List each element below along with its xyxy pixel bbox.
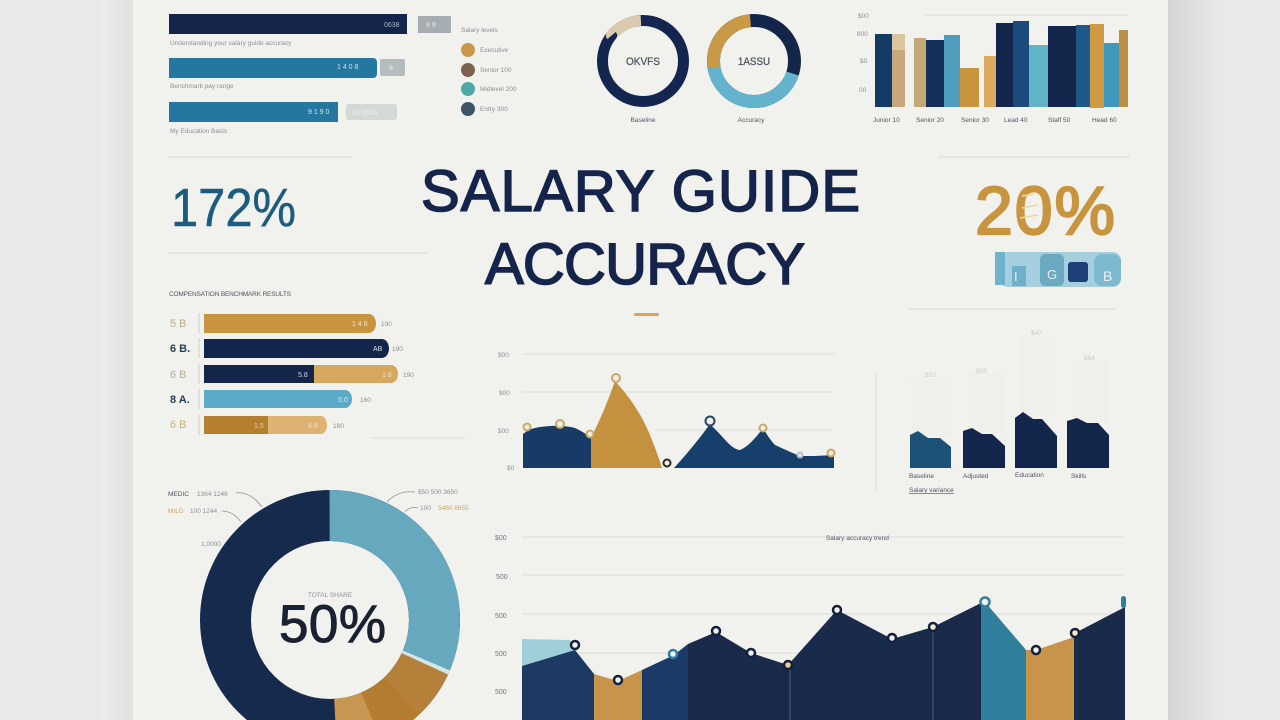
row 2: 190: [392, 346, 403, 353]
blue label block: G: [1047, 267, 1057, 282]
column labels: Skills: [1071, 473, 1087, 480]
axis labels: $00: [498, 428, 509, 435]
value labels: $47: [1031, 330, 1042, 337]
y axis labels: [857, 13, 869, 94]
axis labels: $00: [499, 390, 510, 397]
panel: horizontal bars by group: COMPENSATION BENCHMARK RESULTS: [169, 291, 292, 298]
donut callouts: MEDIC: [168, 491, 189, 498]
y axis labels: $00: [858, 13, 869, 20]
area: gold peak: [591, 381, 662, 468]
panel: top horizontal bars: [169, 14, 451, 135]
bar 3: 28 0000: [352, 110, 377, 117]
column labels: Adjusted: [963, 473, 989, 480]
legend item: gold: Executive: [480, 47, 509, 54]
donut callouts: 100 1244: [190, 508, 217, 515]
column labels: [909, 472, 1087, 494]
row 1: 1 4 8: [352, 321, 368, 328]
row 1: 5 B: [170, 318, 187, 330]
row 4: [170, 389, 371, 409]
bottom area chart: [495, 535, 1126, 720]
bar 1: 8 8: [426, 22, 436, 29]
x axis labels: Lead 40: [1004, 117, 1028, 124]
column labels: Salary variance: [909, 487, 954, 494]
legend item: slate: Entry 300: [480, 106, 508, 113]
area bands: [522, 650, 594, 720]
top right bar chart: [857, 13, 1128, 124]
stat: 172%: 172%: [171, 178, 296, 238]
donut chart 1: Baseline: [631, 117, 656, 124]
y axis labels: $0: [860, 58, 868, 65]
axis labels: [495, 535, 508, 696]
bar 3: 9 1 9 0: [308, 109, 330, 116]
legend item: teal: Midlevel 200: [480, 86, 517, 93]
centre value: TOTAL SHARE: [308, 592, 353, 599]
bar 2: Benchmark pay range: [170, 83, 234, 90]
stat: 20%: [938, 157, 1130, 287]
donut chart 1: OKVFS: [626, 56, 660, 68]
axis labels: [498, 352, 515, 472]
panel: ghost columns chart: [876, 309, 1116, 494]
bar 2: 8: [389, 65, 393, 72]
x axis labels: Staff 50: [1048, 117, 1071, 124]
x axis labels: Senior 30: [961, 117, 989, 124]
row 4: 160: [360, 397, 371, 404]
donut callouts: [168, 489, 469, 548]
y axis labels: 600: [857, 31, 868, 38]
row 4: 8 A.: [170, 394, 190, 406]
title: [421, 159, 860, 316]
x axis labels: Junior 10: [873, 117, 900, 124]
row 2: 6 B.: [170, 343, 190, 355]
axis labels: 500: [495, 613, 507, 620]
bar 2: 1 4 0 8: [337, 64, 359, 71]
value labels: $55: [976, 368, 987, 375]
area: blue right: [674, 424, 834, 468]
donut callouts: 1364 1248: [197, 491, 228, 498]
row 2: AB: [373, 346, 383, 353]
row 5: 1.5: [254, 423, 264, 430]
legend: Salary levels: [461, 27, 499, 34]
row 5: 8.8: [308, 423, 318, 430]
x axis labels: Senior 20: [916, 117, 944, 124]
row 1: [170, 313, 392, 333]
row 5: 6 B: [170, 419, 187, 431]
row 1: 190: [381, 321, 392, 328]
donut chart 2: Accuracy: [738, 117, 765, 124]
axis labels: 500: [496, 574, 508, 581]
legend: [461, 27, 517, 116]
stat: 20%: 20%: [975, 173, 1115, 249]
bar 3: My Education Basis: [170, 128, 228, 135]
value labels: [925, 330, 1095, 379]
dark columns: [910, 431, 951, 468]
column labels: Baseline: [909, 473, 934, 480]
bar 1: [169, 14, 451, 47]
row 3: [170, 364, 414, 384]
markers: [571, 598, 1079, 684]
donut chart 2: 1ASSU: [738, 56, 770, 68]
blue label block: B: [1103, 268, 1112, 284]
bar 1: Understanding your salary guide accuracy: [170, 40, 292, 47]
value labels: $54: [1084, 355, 1095, 362]
blue label block: I: [1014, 269, 1018, 284]
ghost columns: [911, 336, 1109, 436]
legend item: brown: Senior 100: [480, 67, 512, 74]
bar 3: [169, 102, 397, 135]
large donut chart: [200, 490, 460, 720]
donut callouts: 1,0000: [201, 541, 221, 548]
axis labels: 500: [495, 651, 507, 658]
donut chart 2: [703, 10, 805, 124]
value labels: $50: [925, 372, 936, 379]
grid lines: [522, 536, 1125, 538]
area: blue left: [523, 426, 591, 468]
panel: horizontal bars by group: [169, 291, 465, 438]
x axis labels: [873, 117, 1117, 124]
title: ACCURACY: [485, 232, 805, 297]
axis labels: 500: [495, 689, 507, 696]
bottom area chart: Salary accuracy trend: [826, 535, 889, 542]
bar 1: 0638: [384, 22, 400, 29]
row 5: [170, 415, 344, 435]
row 5: 160: [333, 423, 344, 430]
row 3: 6 B: [170, 369, 187, 381]
centre value: 50%: [279, 595, 386, 654]
donut callouts: $50 500 3650: [418, 489, 458, 496]
axis labels: $00: [495, 535, 507, 542]
row 3: 190: [403, 372, 414, 379]
row 3: 5.8: [298, 372, 308, 379]
row 4: 5.0: [338, 397, 348, 404]
donut chart 1: [586, 4, 700, 124]
donut callouts: MILD: [168, 508, 184, 515]
bar 2: [169, 58, 405, 90]
axis labels: $00: [498, 352, 509, 359]
bars: [875, 21, 1128, 108]
axis labels: $0: [507, 465, 515, 472]
y axis labels: 00: [859, 87, 867, 94]
row 2: [170, 338, 403, 358]
middle area chart: [498, 352, 835, 472]
title: SALARY GUIDE: [421, 159, 860, 224]
column labels: Education: [1015, 472, 1044, 479]
light wedge: [522, 639, 575, 666]
markers: [524, 374, 834, 466]
x axis labels: Head 60: [1092, 117, 1117, 124]
donut callouts: 100: [420, 505, 431, 512]
donut callouts: 5460 8655: [438, 505, 469, 512]
blue label block: [995, 252, 1121, 287]
row 3: 1 8: [382, 372, 392, 379]
